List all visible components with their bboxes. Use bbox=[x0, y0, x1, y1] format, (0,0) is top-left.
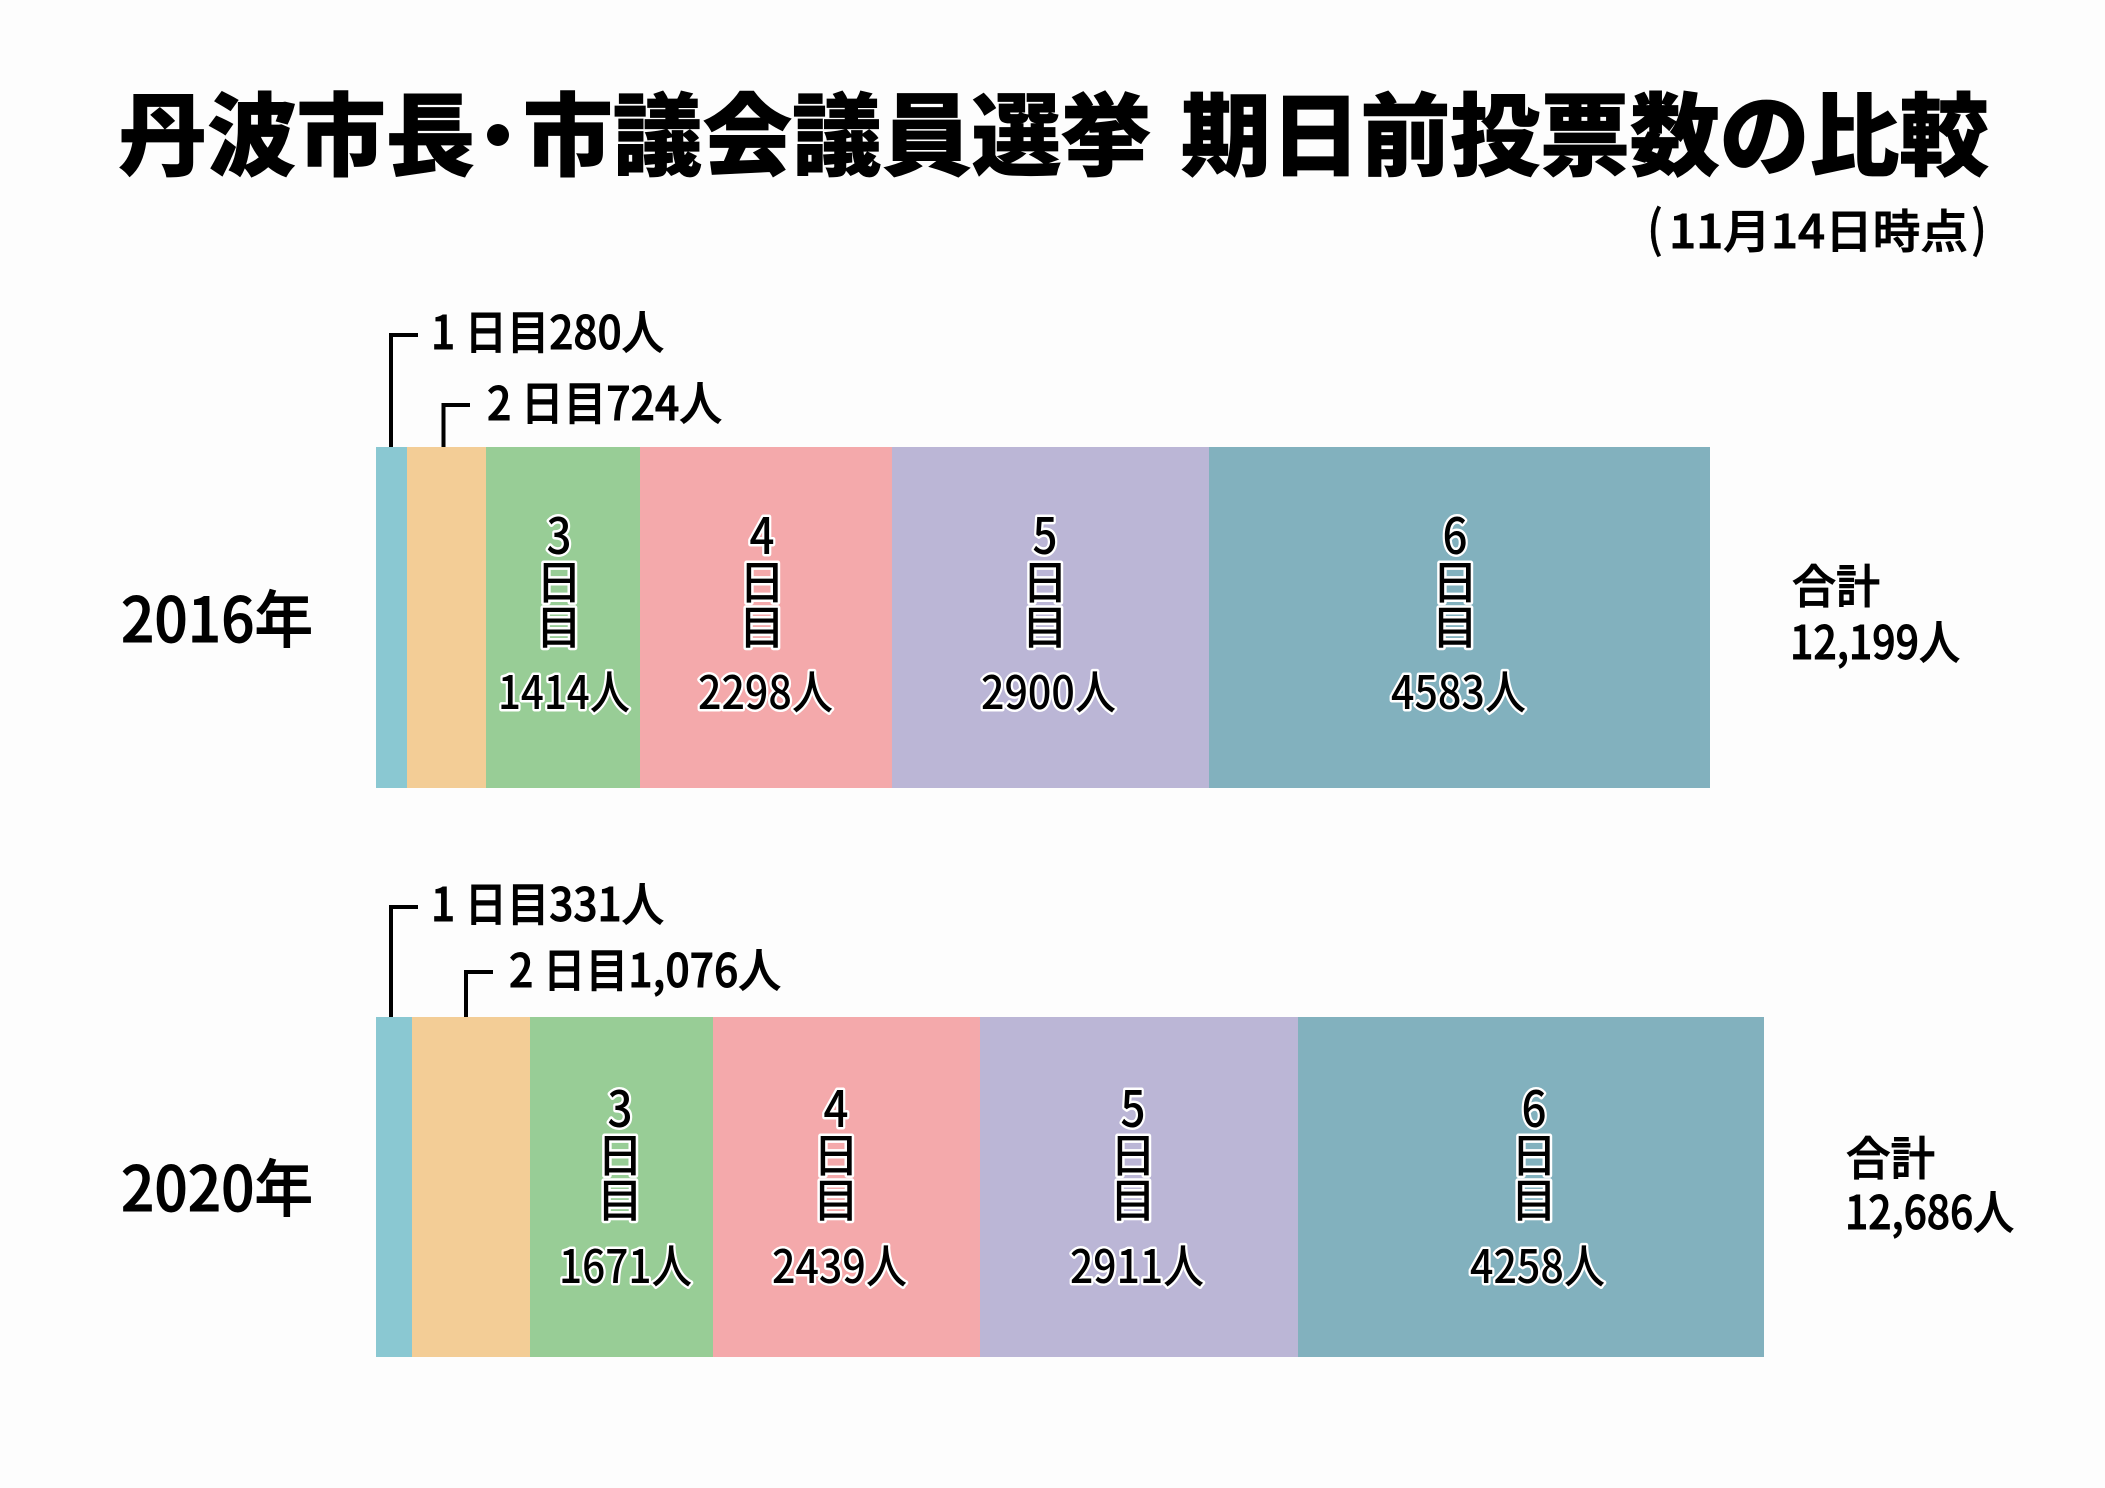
title: 丹波市長 bbox=[118, 64, 475, 194]
panel: 2020 chart bbox=[121, 869, 2014, 1357]
segment label: day 4 bbox=[772, 1070, 907, 1297]
segment label: day 4: 4 bbox=[824, 1070, 848, 1142]
segment label: day 4: 目 bbox=[739, 592, 785, 658]
total 2020: 12,686人 bbox=[1845, 1177, 2014, 1243]
leader and label: day 1: 1 日目331人 bbox=[431, 869, 664, 935]
leader and label: day 2: 2 日目1,076人 bbox=[509, 935, 781, 1001]
segment label: day 5: 日 bbox=[1022, 547, 1068, 613]
subtitle: date note: 11月14日時点 bbox=[1669, 196, 1968, 262]
segment label: day 3: 3 bbox=[546, 497, 572, 569]
segment label: day 5: 5 bbox=[1120, 1070, 1146, 1142]
segment label: day 3: 目 bbox=[536, 592, 582, 658]
title bbox=[118, 64, 1989, 194]
segment label: day 3: 目 bbox=[597, 1165, 643, 1231]
title: 市議会議員選挙 bbox=[523, 64, 1151, 194]
segment label: day 3: 日 bbox=[536, 547, 582, 613]
leader and label: day 1: 1 日目280人 bbox=[431, 297, 664, 363]
segment label: day 5: 2900人 bbox=[981, 657, 1116, 723]
total 2016 bbox=[1790, 551, 1960, 673]
segment label: day 4: 日 bbox=[739, 547, 785, 613]
leader and label: day 2: 2 日目724人 bbox=[487, 368, 722, 434]
leader and label: day 2 bbox=[466, 935, 781, 1017]
year label 2020: 2020年 bbox=[121, 1139, 313, 1229]
title: 期日前投票数の比較 bbox=[1181, 64, 1989, 194]
segment label: day 4: 4 bbox=[750, 497, 774, 569]
year label 2016: 2016年 bbox=[121, 570, 313, 660]
segment label: day 5 bbox=[981, 497, 1116, 723]
total 2020: 合計 bbox=[1846, 1123, 1935, 1189]
segment label: day 6: 6 bbox=[1522, 1070, 1546, 1142]
stacked bar 2020 bbox=[376, 1017, 1764, 1357]
segment label: day 4 bbox=[698, 497, 833, 723]
segment label: day 6 bbox=[1470, 1070, 1605, 1297]
total 2016: 合計 bbox=[1792, 551, 1880, 617]
segment label: day 3 bbox=[498, 497, 630, 723]
segment label: day 6: 日 bbox=[1511, 1120, 1557, 1186]
segment label: day 4: 2298人 bbox=[698, 657, 833, 723]
segment label: day 5: 2911人 bbox=[1070, 1231, 1204, 1297]
segment label: day 6: 目 bbox=[1432, 592, 1478, 658]
segment label: day 6 bbox=[1391, 497, 1526, 723]
panel: 2016 chart bbox=[121, 297, 1960, 788]
segment label: day 5: 日 bbox=[1110, 1120, 1156, 1186]
segment label: day 4: 2439人 bbox=[772, 1231, 907, 1297]
segment label: day 4: 目 bbox=[813, 1165, 859, 1231]
segment label: day 5 bbox=[1070, 1070, 1204, 1297]
leader and label: day 2 bbox=[444, 368, 722, 447]
stacked bar 2016 bbox=[376, 447, 1710, 788]
segment label: day 3: 3 bbox=[608, 1070, 632, 1142]
leader and label: day 1 bbox=[391, 297, 664, 447]
segment label: day 6: 日 bbox=[1432, 547, 1478, 613]
segment label: day 5: 目 bbox=[1022, 592, 1068, 658]
segment label: day 6: 目 bbox=[1511, 1165, 1557, 1231]
segment label: day 6: 4583人 bbox=[1391, 657, 1526, 723]
subtitle: date note: ( bbox=[1647, 190, 1663, 262]
total 2016: 12,199人 bbox=[1790, 607, 1960, 673]
segment label: day 3: 日 bbox=[597, 1120, 643, 1186]
segment label: day 5: 目 bbox=[1110, 1165, 1156, 1231]
segment label: day 6: 6 bbox=[1442, 497, 1468, 569]
segment label: day 3: 1414人 bbox=[498, 657, 630, 723]
segment label: day 5: 5 bbox=[1032, 497, 1058, 569]
subtitle: date note: ) bbox=[1971, 190, 1987, 262]
segment label: day 6: 4258人 bbox=[1470, 1231, 1605, 1297]
segment label: day 3: 1671人 bbox=[559, 1231, 692, 1297]
total 2020 bbox=[1845, 1123, 2014, 1243]
segment label: day 3 bbox=[559, 1070, 692, 1297]
segment label: day 4: 日 bbox=[813, 1120, 859, 1186]
leader and label: day 1 bbox=[391, 869, 664, 1017]
